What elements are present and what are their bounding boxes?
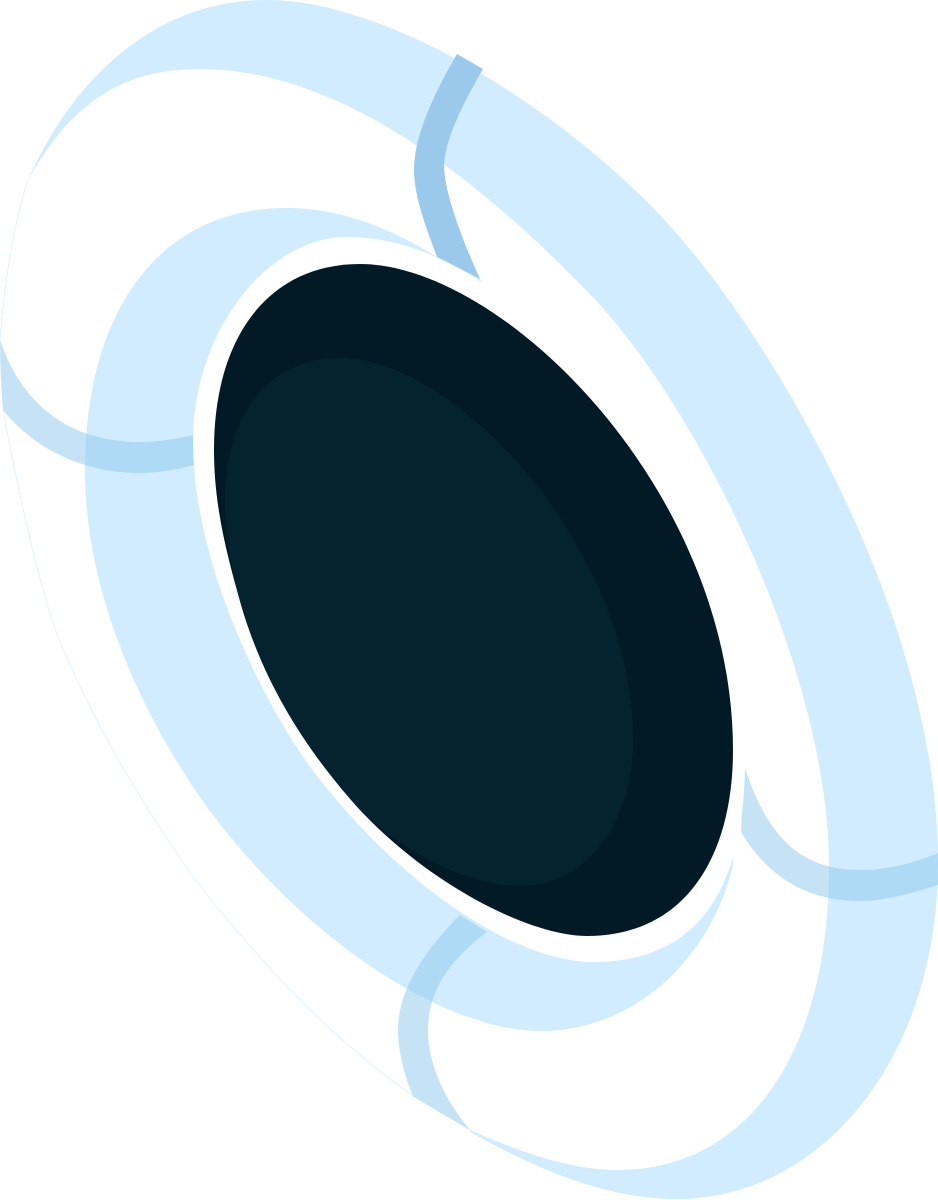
- inner ring band: [85, 208, 733, 1031]
- white gap around ellipse: [193, 237, 745, 962]
- top connecting strap: [414, 54, 483, 279]
- bottom connecting strap: [398, 915, 487, 1130]
- dark ellipse: [214, 264, 733, 936]
- left connecting strap: [0, 340, 194, 473]
- right connecting strap: [741, 765, 938, 901]
- inner lighter ellipse: [225, 358, 633, 886]
